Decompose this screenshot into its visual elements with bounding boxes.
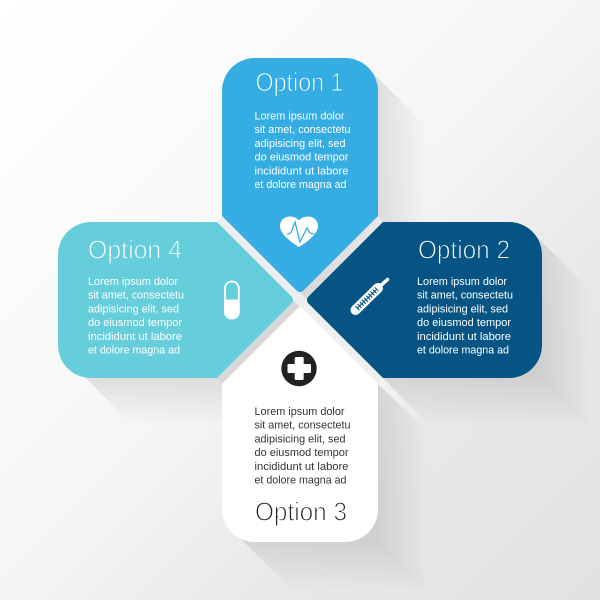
gap strip: option 3 and 4: [217, 300, 300, 384]
panel: option 1: [222, 58, 378, 292]
long shadow: option 4: [68, 346, 222, 426]
option 4 shape: [58, 222, 293, 378]
panel: option 2: [307, 222, 542, 378]
icon: heart with pulse: [280, 216, 318, 247]
long shadow: option 2: [383, 232, 590, 426]
option 3 body text: et dolore magna ad: [254, 474, 346, 486]
option 3 body text: adipisicing elit, sed: [254, 433, 346, 445]
option 1 heading: Option 1: [256, 67, 344, 97]
option 1 body text: et dolore magna ad: [254, 179, 346, 191]
option 2 body text: et dolore magna ad: [417, 344, 509, 356]
option 4 body text: adipisicing elit, sed: [88, 303, 179, 315]
icon: medical cross: [281, 351, 317, 386]
option 3 body text: do eiusmod tempor: [254, 447, 349, 459]
gap strip: option 1 and 4: [217, 216, 307, 307]
light strip extending from gap: [378, 378, 428, 429]
option 1 body text: do eiusmod tempor: [254, 152, 349, 164]
option 3 heading: Option 3: [255, 496, 347, 526]
option 4 body text: Lorem ipsum dolor: [88, 276, 178, 288]
option 4 body text: incididunt ut labore: [88, 331, 182, 343]
option 3 body text: Lorem ipsum dolor: [254, 406, 345, 418]
icon: thermometer: [356, 280, 388, 310]
option 3 body text: incididunt ut labore: [254, 461, 348, 473]
option 3 shape: [222, 308, 378, 542]
option 1 body text: Lorem ipsum dolor: [254, 110, 345, 122]
option 2 body text: incididunt ut labore: [417, 331, 511, 343]
option 2 body text: do eiusmod tempor: [417, 317, 511, 329]
option 2 heading: Option 2: [418, 234, 510, 264]
icon: pill capsule: [224, 282, 240, 320]
option 1 body text: incididunt ut labore: [254, 165, 348, 177]
option 4 body text: do eiusmod tempor: [88, 317, 182, 329]
gap strip: option 2 and 3: [293, 293, 383, 384]
option 2 shape: [307, 222, 542, 378]
panel: option 4: [58, 222, 293, 378]
gap strip: option 1 and 2: [300, 216, 383, 300]
option 4 body text: sit amet, consectetu: [88, 290, 184, 302]
option 2 body text: sit amet, consectetu: [417, 290, 513, 302]
option 1 body text: adipisicing elit, sed: [254, 138, 346, 150]
option 2 body text: adipisicing elit, sed: [417, 303, 508, 315]
option 2 body text: Lorem ipsum dolor: [417, 276, 507, 288]
option 4 heading: Option 4: [88, 234, 182, 264]
option 1 shape: [222, 58, 378, 292]
option 3 body text: sit amet, consectetu: [254, 420, 350, 432]
option 4 body text: et dolore magna ad: [88, 344, 180, 356]
long shadow: option 3: [236, 384, 428, 592]
panel: option 3: [222, 308, 378, 542]
option 1 body text: sit amet, consectetu: [254, 124, 350, 136]
long shadow: option 1: [360, 72, 428, 240]
